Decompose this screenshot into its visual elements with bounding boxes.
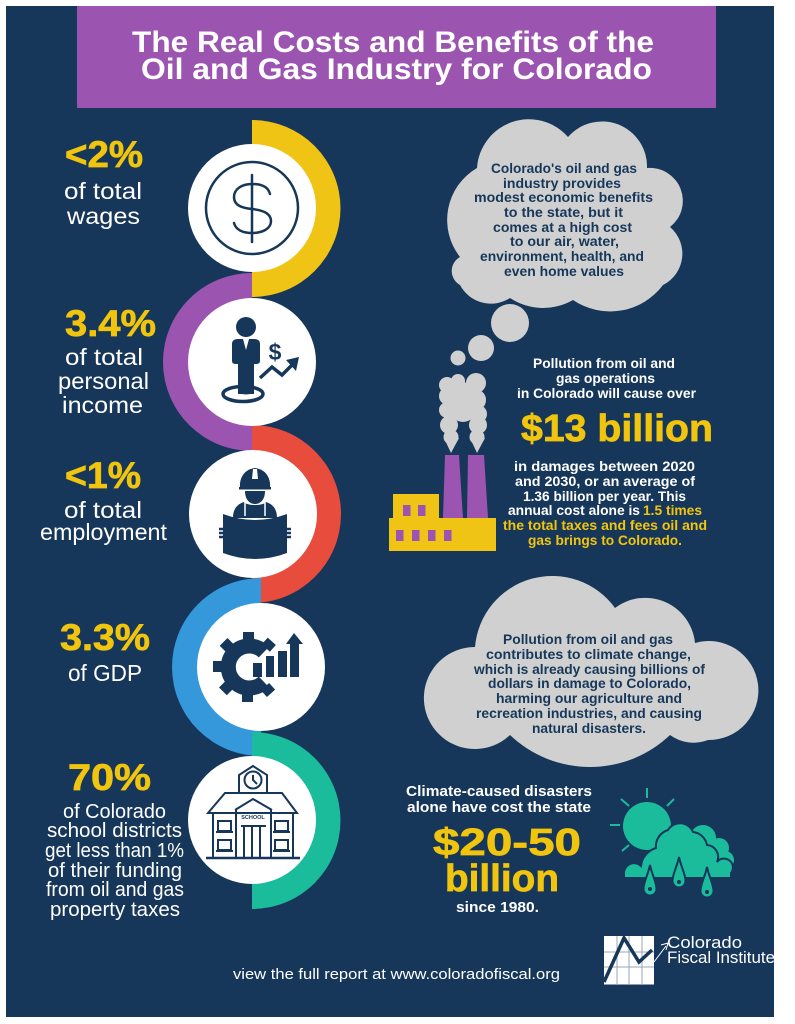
stat: personal income: of total [65,344,143,370]
text block: pollution damages [503,355,713,548]
thought cloud: economic benefits: comes at a high cost [493,219,632,235]
icon: construction worker reading plans [189,450,317,578]
thought cloud: economic benefits: even home values [504,263,624,279]
thought cloud: economic benefits: Colorado's oil and gas [491,160,637,176]
footer link text: view the full report at www.coloradofiscal.org [233,967,560,983]
stat: school districts [45,757,184,921]
text block: pollution damages: the total taxes and fees oil and [503,517,707,533]
thought cloud: economic benefits: to our air, water, [510,233,619,249]
text block: pollution damages: 1.5 times [643,502,702,518]
cloud: climate change: Pollution from oil and gas [503,631,673,647]
big number: 13 billion: $13 billion [521,408,713,450]
thought cloud: economic benefits: modest economic benefits [474,189,653,205]
stat: GDP: 3.3% [60,617,150,658]
logo: Colorado Fiscal Institute [604,933,775,985]
stat: GDP: of GDP [68,660,142,686]
stat: employment: of total [64,497,142,523]
cloud: climate change: dollars in damage to Colorado, [488,675,691,691]
coloured ribbon of half rings [163,120,341,909]
text block: climate disasters cost: alone have cost the state [407,800,591,816]
cloud: climate change: contributes to climate change, [486,646,691,662]
stat: personal income: 3.4% [65,303,156,344]
thought cloud: economic benefits: to the state, but it [504,204,623,220]
icon: businessman with rising income [188,298,316,426]
text block: pollution damages: and 2030, or an average of [515,473,695,489]
title banner: Oil and Gas Industry for Colorado [141,53,652,86]
stat: employment [40,455,168,545]
stat: school districts: 70% [68,757,151,798]
stat: wages: of total [64,178,142,204]
cloud: climate change: which is already causing billions of [473,661,705,677]
text block: pollution damages: 1.36 billion per year. This [523,488,686,504]
icon: sun, cloud and rain [610,788,734,898]
text block: pollution damages: gas brings to Colorado. [528,532,682,548]
text block: climate disasters cost: since 1980. [456,900,539,916]
stat: school districts: from oil and gas [46,878,184,901]
stat: personal income: income [62,392,143,418]
stat: school districts: property taxes [50,898,180,921]
stat: personal income: personal [58,368,149,394]
text block: climate disasters cost: billion [445,858,559,900]
stat: personal income [58,303,156,418]
cloud: climate change [424,576,758,767]
cloud: climate change: natural disasters. [532,720,646,736]
thought bubbles [450,304,529,366]
logo: Colorado Fiscal Institute: Colorado [667,933,742,952]
text block: pollution damages: gas operations [556,370,655,386]
icon: dollar coin [188,144,316,272]
stat: GDP [60,617,150,686]
stat: school districts: school districts [47,819,182,842]
stat: school districts: of their funding [48,859,182,882]
stat: employment: employment [40,519,168,545]
text block: pollution damages: in Colorado will cause over [517,385,697,401]
thought cloud: economic benefits: environment, health, and [480,248,644,264]
icon: businessman with rising income: $ [269,339,282,365]
cloud: climate change: recreation industries, and causing [476,705,702,721]
stat: wages [64,134,143,229]
stat: school districts: of Colorado [63,800,166,823]
cloud: climate change: harming our agriculture and [496,690,682,706]
stat: school districts: get less than 1% [45,839,184,862]
thought cloud: economic benefits [447,119,683,311]
text block: pollution damages: annual cost alone is [508,502,640,518]
text block: pollution damages: in damages between 2020 [514,458,695,474]
icon: factory with smoke [389,373,496,551]
text block: climate disasters cost [406,784,592,916]
stat: wages: <2% [65,134,143,175]
text block: pollution damages: Pollution from oil and [533,355,675,371]
icon: school building: SCHOOL [241,815,265,821]
text block: climate disasters cost: Climate-caused disasters [406,784,592,800]
title banner [77,6,716,108]
icon: gear with growth bars [197,603,325,731]
icon: school building [188,756,316,884]
title banner: The Real Costs and Benefits of the [132,26,654,59]
big number: 20-50 billion: $20-50 [433,822,581,864]
logo: Colorado Fiscal Institute: Fiscal Institute [667,948,775,967]
thought cloud: economic benefits: industry provides [503,175,621,191]
stat: employment: <1% [65,455,141,496]
stat: wages: wages [66,203,140,229]
